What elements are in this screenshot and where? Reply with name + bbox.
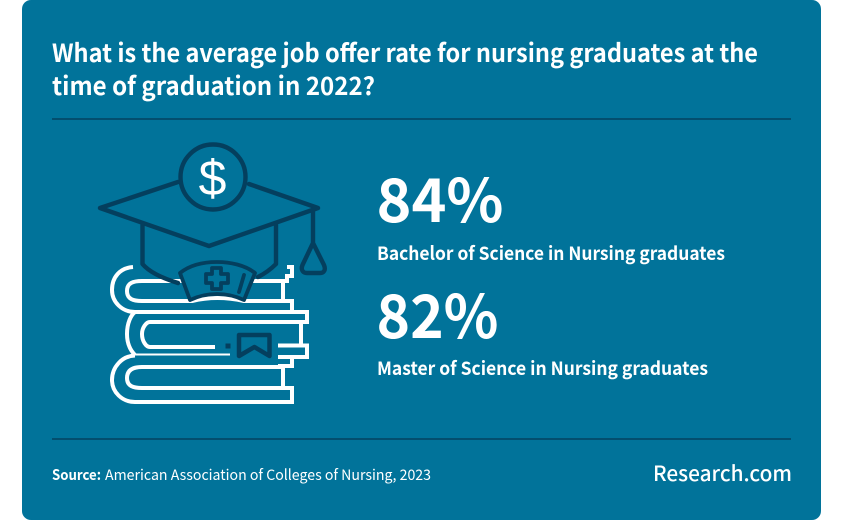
- stat: master: [376, 269, 708, 381]
- title: What is the average job offer rate for nursing graduates at the: [52, 34, 758, 70]
- source: American Association of Colleges of Nursing, 2023: [105, 464, 431, 485]
- icon: graduation cap with dollar coin: [100, 144, 325, 283]
- middle book: [135, 312, 307, 347]
- tassel: [302, 210, 325, 273]
- stat: bachelor: [376, 153, 725, 266]
- icon: bookmark: [226, 335, 270, 356]
- icon: books stack: [112, 267, 307, 402]
- dollar sign: $: [199, 150, 226, 206]
- cap board: [100, 182, 318, 246]
- logo: Research.com: [653, 458, 792, 488]
- stat: bachelor: 84%: [376, 153, 504, 240]
- bottom book: [112, 356, 292, 402]
- title: time of graduation in 2022?: [52, 67, 375, 103]
- stat: master: Master of Science in Nursing graduates: [377, 355, 708, 381]
- title: [52, 34, 758, 103]
- stat: bachelor: Bachelor of Science in Nursing graduates: [377, 240, 725, 266]
- stat: master: 82%: [376, 269, 498, 356]
- top book: [112, 267, 135, 312]
- cap base: [142, 225, 276, 283]
- coin: [180, 144, 246, 210]
- icon: nurse cap: [180, 262, 255, 300]
- source: Source:: [52, 464, 101, 485]
